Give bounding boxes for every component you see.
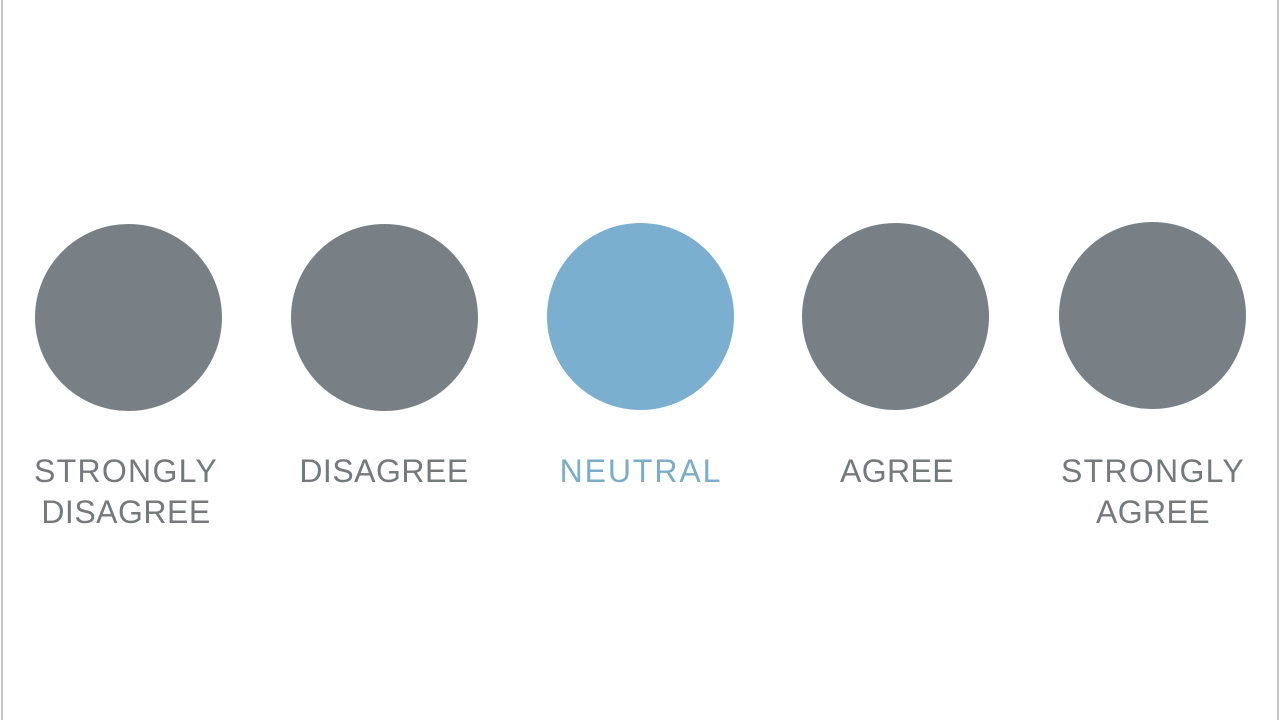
circle: strongly agree [1059,222,1246,409]
label: disagree: DISAGREE [299,453,469,489]
circle: agree [802,223,989,410]
option: neutral [547,223,734,489]
label: strongly agree: AGREE [1096,494,1210,530]
circle: strongly disagree [35,224,222,411]
label: agree: AGREE [840,453,954,489]
label: neutral: NEUTRAL [560,453,722,489]
circle: disagree [291,224,478,411]
label: strongly disagree: STRONGLY [34,453,218,489]
option: agree [802,223,989,489]
label: strongly disagree: DISAGREE [41,494,211,530]
circle: neutral [547,223,734,410]
option: strongly disagree [34,224,222,530]
option: disagree [291,224,478,489]
option: strongly agree [1059,222,1246,530]
label: strongly agree [1061,453,1245,530]
label: strongly agree: STRONGLY [1061,453,1245,489]
label: strongly disagree [34,453,218,530]
